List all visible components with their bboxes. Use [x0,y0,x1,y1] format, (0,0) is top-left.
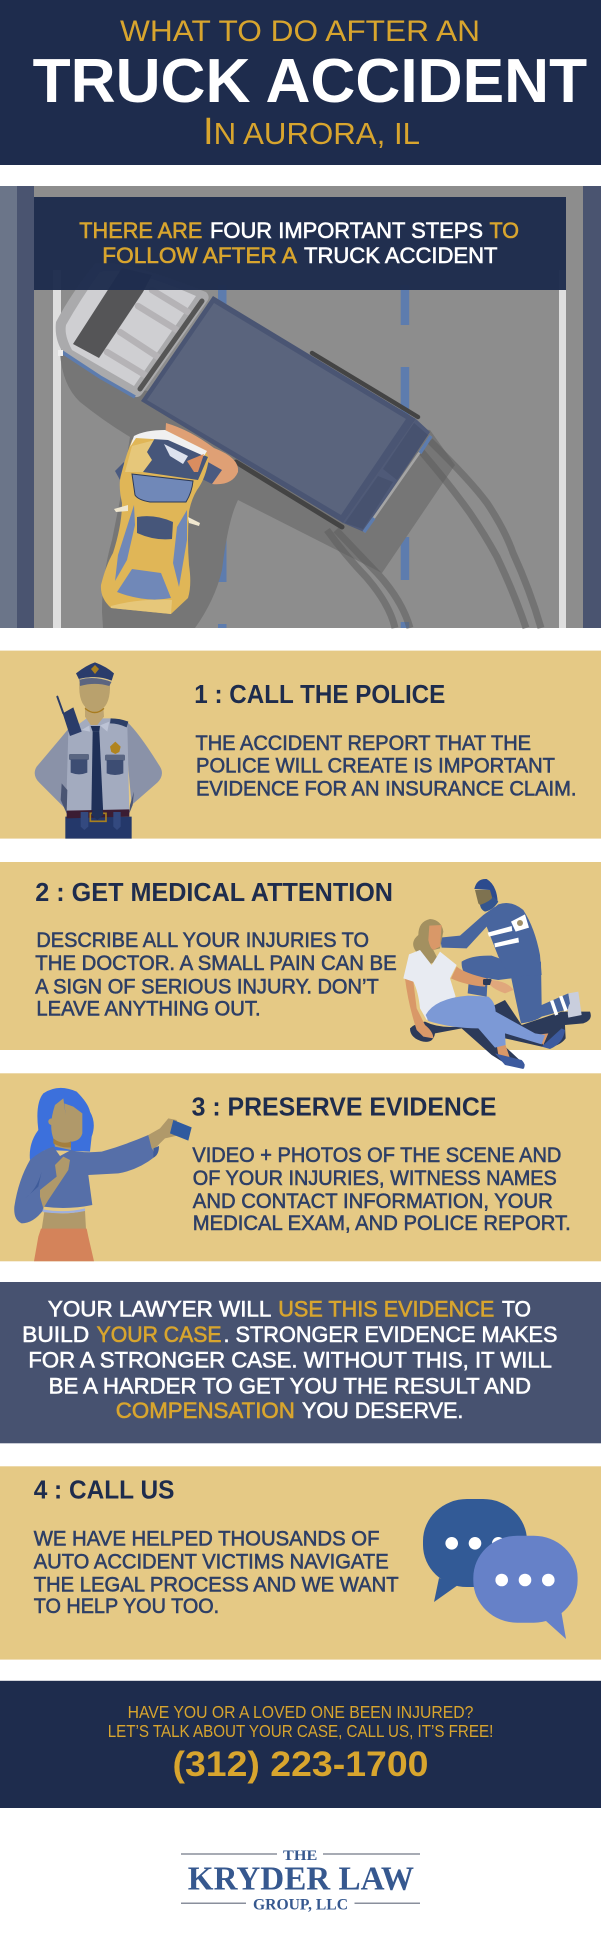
step 4 heading: 4 : CALL US [34,1474,174,1504]
panel: evidence callout: FOR A STRONGER CASE. WITHOUT THIS, IT WILL [28,1347,552,1372]
step 2 body text: THE DOCTOR. A SMALL PAIN CAN BE [35,951,397,975]
panel: call to action footer [0,1681,601,1808]
truck trailer [141,296,431,532]
logo: the kryder law group [181,1848,420,1914]
icon: paramedic helping patient [403,879,591,1069]
icon: woman taking a photo [14,1088,192,1261]
intro banner: TO [490,218,519,243]
step 3 body text: AND CONTACT INFORMATION, YOUR [193,1189,553,1213]
panel: step 4 call us [0,1466,601,1660]
panel: step 3 preserve evidence [0,1073,601,1261]
step 1 heading: 1 : CALL THE POLICE [194,679,445,709]
tyre tracks [327,441,541,628]
panel: evidence callout: USE THIS EVIDENCE [278,1296,494,1322]
logo: the kryder law group: GROUP, LLC [253,1897,348,1914]
step 2 heading: 2 : GET MEDICAL ATTENTION [35,877,393,907]
intro banner: FOLLOW AFTER A [102,243,297,268]
step 3 heading: 3 : PRESERVE EVIDENCE [192,1092,496,1122]
icon: police officer [35,662,162,839]
step 4 body text [34,1526,399,1618]
phone number: (312) 223-1700 [172,1745,428,1784]
panel: evidence callout [0,1282,601,1443]
panel: evidence callout: YOU DESERVE. [302,1398,463,1423]
injured area under car [115,423,238,484]
step 4 body text: TO HELP YOU TOO. [34,1594,219,1618]
truck cab [56,263,209,397]
panel: evidence callout: TO [502,1296,531,1322]
intro banner [34,197,566,290]
panel: call to action footer: LET’S TALK ABOUT YOUR CASE, CALL US, IT’S FREE! [108,1721,493,1741]
intro banner: TRUCK ACCIDENT [304,243,498,268]
step 1 body text [196,731,576,800]
yellow car [101,430,209,614]
intro banner: THERE ARE [79,218,202,243]
title: truck accident: TRUCK ACCIDENT [33,47,587,116]
panel: evidence callout: YOUR LAWYER WILL [48,1296,271,1322]
panel: evidence callout: . STRONGER EVIDENCE MAKES [224,1322,558,1347]
step 2 body text: A SIGN OF SERIOUS INJURY. DON’T [35,974,379,998]
step 4 body text: THE LEGAL PROCESS AND WE WANT [34,1572,399,1596]
step 1 body text: POLICE WILL CREATE IS IMPORTANT [196,754,555,778]
step 2 body text [35,928,397,1020]
shadow [60,352,455,628]
panel: evidence callout: COMPENSATION [116,1398,295,1423]
panel: step 2 get medical attention [0,862,601,1069]
panel: evidence callout: YOUR CASE [97,1322,222,1347]
logo: the kryder law group: KRYDER LAW [188,1861,414,1898]
lane dashes [218,285,409,628]
title line: what to do after an: WHAT TO DO AFTER AN [120,15,480,48]
step 3 body text: MEDICAL EXAM, AND POLICE REPORT. [193,1211,571,1235]
road crash illustration [0,186,601,628]
step 2 body text: LEAVE ANYTHING OUT. [36,996,261,1020]
icon: chat bubbles [423,1499,578,1639]
panel: step 1 call the police [0,651,601,839]
step 1 body text: EVIDENCE FOR AN INSURANCE CLAIM. [196,776,576,800]
step 4 body text: WE HAVE HELPED THOUSANDS OF [34,1526,379,1550]
header panel [0,0,601,165]
step 1 body text: THE ACCIDENT REPORT THAT THE [196,731,531,755]
step 2 body text: DESCRIBE ALL YOUR INJURIES TO [36,928,369,952]
title line: in aurora, il: IN AURORA, IL [203,111,420,153]
panel: call to action footer: HAVE YOU OR A LOVED ONE BEEN INJURED? [128,1702,474,1722]
panel: evidence callout: BE A HARDER TO GET YOU THE RESULT AND [49,1373,531,1398]
step 4 body text: AUTO ACCIDENT VICTIMS NAVIGATE [34,1549,389,1573]
step 3 body text: VIDEO + PHOTOS OF THE SCENE AND [192,1143,561,1167]
intro banner: FOUR IMPORTANT STEPS [210,218,483,243]
step 3 body text: OF YOUR INJURIES, WITNESS NAMES [193,1166,557,1190]
panel: evidence callout: BUILD [22,1322,89,1347]
logo: the kryder law group: THE [283,1848,317,1864]
step 3 body text [192,1143,571,1235]
